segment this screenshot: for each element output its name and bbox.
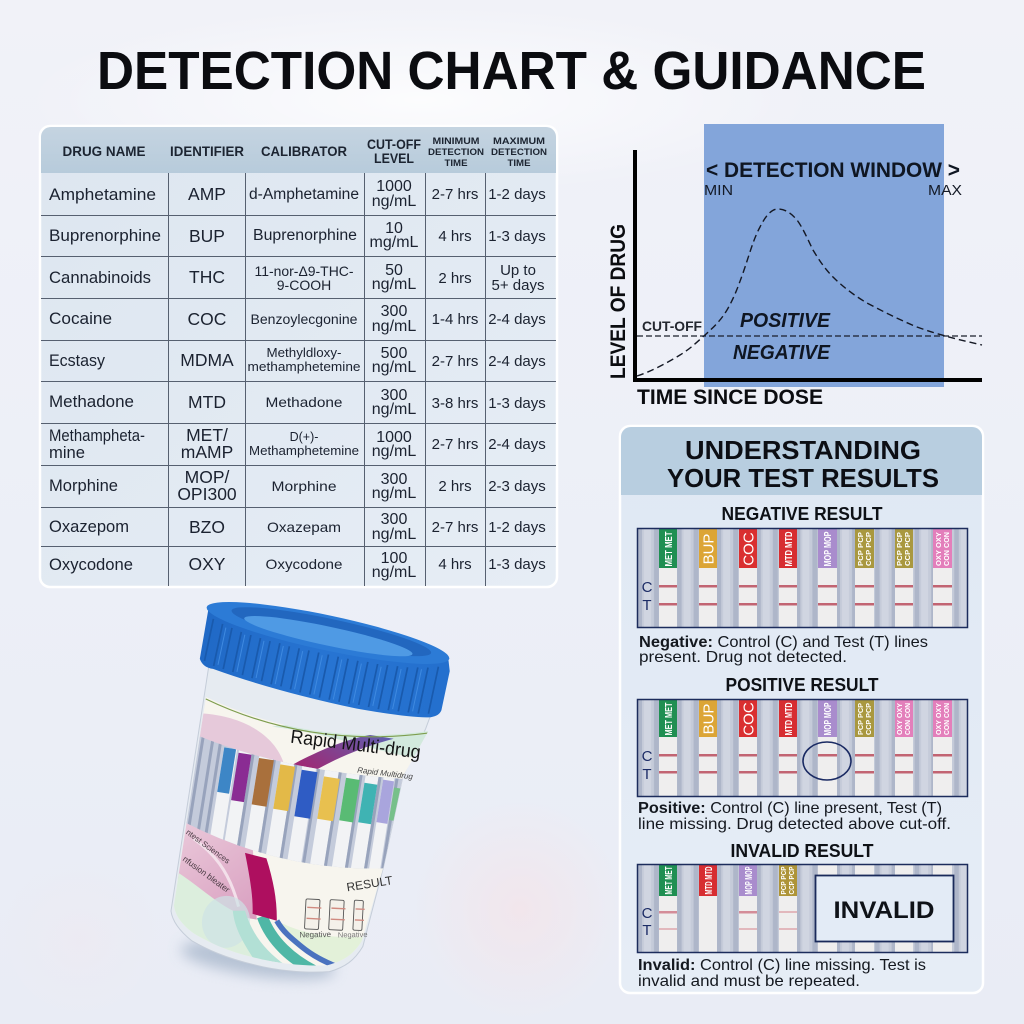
- negative result strips: BUP: [700, 534, 718, 564]
- lid top rim: [203, 590, 453, 676]
- cup body: [164, 664, 436, 987]
- table row: Oxazepom: 2-7 hrs: [432, 519, 478, 536]
- table row: Ecstasy: Ecstasy: [49, 351, 105, 370]
- table header: DETECTION: [428, 147, 484, 158]
- table row: Morphine: ng/mL: [372, 485, 416, 502]
- table header: DRUG NAME: [62, 144, 146, 159]
- positive result strips: BUP: [700, 704, 718, 734]
- table row: Buprenorphine: Buprenorphine: [253, 227, 357, 244]
- table row: Ecstasy: Methyldloxy-: [266, 346, 342, 360]
- magenta band: [245, 852, 277, 921]
- invalid result strips: [637, 864, 968, 953]
- invalid explanation: Invalid: Control (C) line missing. Test is: [638, 957, 926, 974]
- table row: Cocaine: Benzoylecgonine: [250, 311, 358, 327]
- lid inner surface: [242, 609, 414, 663]
- table row: Ecstasy: 500: [381, 345, 407, 362]
- invalid result strips: CCP PCP: [787, 866, 796, 894]
- title: DETECTION CHART & GUIDANCE: [97, 41, 926, 101]
- positive result strips: CON CON: [903, 703, 912, 735]
- table row: Buprenorphine: 10: [385, 220, 403, 237]
- table header: MINIMUM: [432, 136, 480, 147]
- table row: Morphine: 2-3 days: [488, 478, 546, 495]
- table row: Cocaine: [49, 303, 546, 335]
- negative explanation: present. Drug not detected.: [639, 649, 847, 666]
- label artwork: [174, 697, 428, 966]
- table header: MAXIMUM: [493, 136, 545, 147]
- pale green corner: [282, 923, 363, 962]
- table header: DETECTION: [491, 147, 547, 158]
- table row: Methamphetamine: MET/: [186, 425, 228, 445]
- negative result strips: PCP PCP: [856, 532, 865, 566]
- table row: Methamphetamine: Methamphetemine: [249, 443, 359, 458]
- positive result strips: CCP PCP: [864, 703, 873, 735]
- table row: Oxazepom: [49, 511, 546, 543]
- negative result strips: CCP PCP: [864, 532, 873, 566]
- test strip window: [186, 736, 402, 868]
- table row: Buprenorphine: 4 hrs: [438, 228, 472, 245]
- lower green wash: [174, 873, 252, 957]
- table row: Cannabinoids: 9-COOH: [277, 277, 331, 293]
- negative result strips: COC: [740, 532, 758, 566]
- table row: Oxycodone: Oxycodone: [266, 556, 343, 572]
- panel heading: UNDERSTANDING: [685, 435, 921, 465]
- upper pink swirl: [199, 714, 284, 762]
- max label: MAX: [928, 182, 962, 199]
- table row: Oxycodone: OXY: [189, 554, 226, 574]
- table row: Methamphetamine: mAMP: [181, 442, 233, 462]
- table row: Morphine: Morphine: [49, 476, 118, 495]
- product photo: test cup: [170, 602, 450, 972]
- negative result strips: OXY OXY: [934, 532, 943, 566]
- table row: Amphetamine: Amphetamine: [49, 185, 156, 204]
- cup shadow: [179, 933, 337, 987]
- table row: Morphine: MOP/: [185, 467, 229, 487]
- positive result heading: POSITIVE RESULT: [726, 675, 879, 695]
- table row: Ecstasy: 2-4 days: [488, 353, 546, 370]
- table row: Amphetamine: d-Amphetamine: [249, 186, 359, 203]
- table row: Amphetamine: [49, 178, 546, 210]
- y axis label: LEVEL OF DRUG: [607, 224, 630, 379]
- table row: Cannabinoids: 50: [385, 262, 403, 279]
- table row: Oxycodone: [49, 550, 546, 581]
- table row: Cannabinoids: [49, 262, 544, 294]
- table row: Methadone: 300: [381, 387, 407, 404]
- table row: Oxazepom: 300: [381, 511, 407, 528]
- table row: Methamphetamine: Methampheta-: [49, 426, 145, 445]
- table row: Methadone: 1-3 days: [488, 395, 546, 412]
- table row: Oxycodone: ng/mL: [372, 564, 416, 581]
- table row: Cannabinoids: ng/mL: [372, 276, 416, 293]
- missing line circle: [803, 742, 851, 780]
- table row: Methamphetamine: [49, 425, 546, 462]
- table row: Oxycodone: 100: [381, 550, 407, 567]
- invalid result strips: PCP PCP: [779, 866, 788, 894]
- table row: Morphine: 300: [381, 471, 407, 488]
- blue arc: [274, 919, 335, 966]
- negative result strips: MET MET: [664, 532, 675, 566]
- table row: Cocaine: 2-4 days: [488, 311, 546, 328]
- positive result strips: OXY OXY: [895, 703, 904, 735]
- table row: Buprenorphine: BUP: [189, 226, 225, 246]
- negative label: NEGATIVE: [733, 342, 831, 364]
- invalid result heading: INVALID RESULT: [730, 841, 874, 861]
- cup label text: Negative: [338, 930, 368, 940]
- table header: IDENTIFIER: [170, 144, 244, 159]
- table row: Ecstasy: MDMA: [180, 350, 234, 370]
- positive result strips: CON CON: [942, 703, 951, 735]
- table row: Cannabinoids: Up to: [500, 262, 536, 279]
- invalid stamp: [816, 876, 954, 942]
- table header: TIME: [508, 158, 530, 169]
- table row: Cannabinoids: 2 hrs: [438, 270, 472, 287]
- invalid explanation: [638, 957, 926, 990]
- positive result strips: MOP MOP: [823, 702, 834, 736]
- table row: Morphine: 2 hrs: [438, 478, 472, 495]
- positive result strips: [637, 699, 968, 797]
- upper green swirl: [272, 725, 428, 757]
- table row: Methamphetamine: 2-4 days: [488, 436, 546, 453]
- table row: Morphine: [49, 467, 546, 504]
- lower pink wash: [178, 818, 257, 920]
- cut-off label: CUT-OFF: [642, 318, 702, 334]
- negative result strips: CCP PCP: [903, 532, 912, 566]
- positive explanation: [638, 800, 951, 833]
- table row: Methadone: Methadone: [266, 394, 343, 410]
- negative result strips: T: [642, 597, 652, 614]
- table row: Morphine: OPI300: [177, 484, 237, 504]
- table row: Oxycodone: 4 hrs: [438, 556, 472, 573]
- table row: Cocaine: ng/mL: [372, 318, 416, 335]
- panel heading: [667, 435, 939, 493]
- negative explanation: [639, 634, 928, 666]
- lid ridges: [202, 619, 438, 720]
- invalid result strips: T: [642, 922, 652, 939]
- negative result heading: NEGATIVE RESULT: [722, 504, 883, 524]
- table row: Methadone: Methadone: [49, 392, 134, 411]
- cut-off dashed line: [637, 335, 982, 337]
- table row: Amphetamine: 2-7 hrs: [432, 186, 478, 203]
- purple swoosh: [293, 735, 394, 769]
- table row: Cannabinoids: 5+ days: [492, 277, 544, 294]
- cup body and label: [170, 668, 430, 972]
- table row: Cocaine: Cocaine: [49, 309, 112, 328]
- table header: LEVEL: [374, 151, 414, 166]
- table row: Oxazepom: Oxazepam: [267, 519, 341, 535]
- table row: Amphetamine: 1-2 days: [488, 186, 546, 203]
- x axis label: TIME SINCE DOSE: [637, 386, 823, 409]
- table row: Methadone: 3-8 hrs: [432, 395, 478, 412]
- negative result strips: [637, 528, 968, 628]
- detection window band: [704, 124, 944, 387]
- table row: Cannabinoids: 11-nor-Δ9-THC-: [254, 263, 354, 279]
- table row: Oxycodone: 1-3 days: [488, 556, 546, 573]
- strip tabs: [217, 747, 400, 824]
- panel: detection table: [40, 126, 557, 587]
- table header: [62, 136, 547, 169]
- positive result strips: COC: [740, 702, 758, 736]
- table row: Ecstasy: ng/mL: [372, 359, 416, 376]
- cup label text: nfusion bleater: [181, 854, 232, 895]
- teal arc: [257, 916, 316, 966]
- table row: Cocaine: 300: [381, 303, 407, 320]
- invalid result strips: MTD MTD: [704, 866, 715, 894]
- negative result strips: MOP MOP: [823, 531, 834, 566]
- positive label: POSITIVE: [740, 310, 831, 332]
- table row: Oxazepom: Oxazepom: [49, 517, 129, 536]
- table header: CUT-OFF: [367, 137, 421, 152]
- lid inner ring: [229, 598, 434, 665]
- panel heading: YOUR TEST RESULTS: [667, 463, 939, 493]
- table row: Cannabinoids: Cannabinoids: [49, 268, 151, 287]
- table row: Ecstasy: methamphetemine: [248, 360, 361, 374]
- table row: Amphetamine: ng/mL: [372, 193, 416, 210]
- invalid result strips: MOP MOP: [744, 866, 755, 894]
- invalid stamp: INVALID: [834, 897, 934, 924]
- detection window heading: < DETECTION WINDOW >: [706, 159, 960, 182]
- table row: Methamphetamine: D(+)-: [290, 430, 318, 444]
- positive result strips: PCP PCP: [856, 703, 865, 735]
- negative result strips: C: [642, 579, 653, 596]
- table row: Methamphetamine: ng/mL: [372, 443, 416, 460]
- table row: Methamphetamine: 1000: [376, 429, 412, 446]
- table row: Oxazepom: ng/mL: [372, 526, 416, 543]
- invalid result strips: MET MET: [664, 866, 675, 895]
- table row: Buprenorphine: [49, 220, 546, 251]
- table row: Morphine: Morphine: [272, 478, 337, 494]
- negative result strips: MTD MTD: [784, 532, 795, 566]
- table row: Cocaine: 1-4 hrs: [432, 311, 478, 328]
- positive result strips: MTD MTD: [784, 702, 795, 736]
- table row: Buprenorphine: Buprenorphine: [49, 226, 161, 245]
- table row: Cannabinoids: THC: [189, 267, 225, 287]
- cup label text: ntest Sciences: [184, 828, 232, 866]
- chart: detection window: [607, 124, 982, 409]
- table row: Ecstasy: [49, 345, 546, 376]
- positive result strips: MET MET: [664, 702, 675, 736]
- invalid explanation: invalid and must be repeated.: [638, 973, 860, 990]
- table row: Cocaine: COC: [188, 309, 226, 329]
- table header: TIME: [444, 158, 468, 169]
- table row: Methadone: MTD: [188, 392, 226, 412]
- cup label text: Rapid Multidrug: [357, 766, 414, 781]
- positive result strips: T: [642, 766, 652, 783]
- positive result strips: C: [642, 748, 653, 765]
- negative result strips: CON CON: [942, 532, 951, 566]
- invalid result strips: C: [642, 905, 653, 922]
- cup label text: Rapid Multi-drug: [289, 727, 422, 764]
- panel: understanding your test results: [620, 426, 983, 993]
- positive explanation: line missing. Drug detected above cut-off.: [638, 816, 951, 833]
- table row: Methadone: ng/mL: [372, 401, 416, 418]
- table row: Amphetamine: 1000: [376, 178, 412, 195]
- positive result strips: OXY OXY: [934, 703, 943, 735]
- positive explanation: Positive: Control (C) line present, Test (T): [638, 800, 942, 817]
- table row: Methadone: [49, 387, 546, 418]
- table row: Ecstasy: 2-7 hrs: [432, 353, 478, 370]
- table row: Oxycodone: Oxycodone: [49, 555, 133, 574]
- table row: Buprenorphine: mg/mL: [370, 234, 419, 251]
- drug level curve: [637, 209, 982, 376]
- table row: Buprenorphine: 1-3 days: [488, 228, 546, 245]
- lid skirt: [195, 608, 452, 726]
- mini result icons: [301, 892, 367, 938]
- table row: Methamphetamine: mine: [49, 443, 85, 462]
- negative result strips: PCP PCP: [895, 532, 904, 566]
- cup lid: [193, 590, 456, 726]
- chart axes: [635, 150, 982, 380]
- cup label text: [171, 708, 423, 954]
- cup label text: RESULT: [346, 873, 394, 894]
- table row: Oxazepom: BZO: [189, 517, 225, 537]
- table row: Oxazepom: 1-2 days: [488, 519, 546, 536]
- table row: Methamphetamine: 2-7 hrs: [432, 436, 478, 453]
- cup label text: Negative: [299, 930, 332, 939]
- min label: MIN: [704, 182, 733, 199]
- table row: Amphetamine: AMP: [188, 184, 226, 204]
- negative explanation: Negative: Control (C) and Test (T) lines: [639, 634, 928, 651]
- table header: CALIBRATOR: [261, 144, 347, 159]
